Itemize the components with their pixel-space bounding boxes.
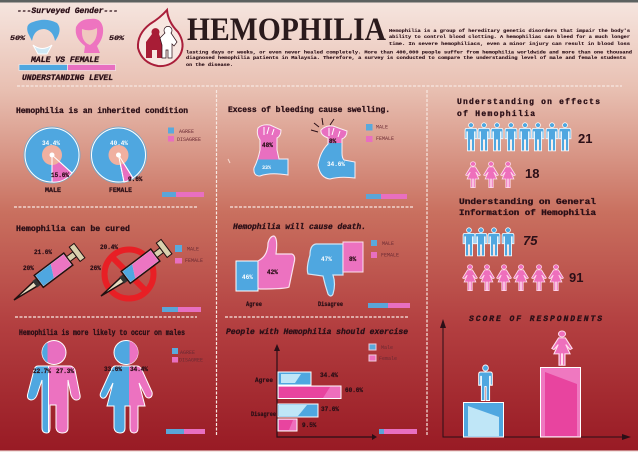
fist: first: 33%: [262, 165, 271, 171]
heading: Understanding on effects: [457, 98, 600, 107]
pie chart: female: [90, 126, 147, 184]
logo: blood drop with figures: [138, 10, 183, 66]
panel: swelling: [228, 106, 407, 199]
panel: score of respondents: [440, 315, 631, 440]
label: male vs female: MALE VS FEMALE: [30, 56, 99, 65]
pictogram: female 18: [466, 162, 539, 188]
heading: Hemophilia is an inherited condition: [16, 107, 188, 116]
pictogram: male 21: [465, 123, 592, 151]
panel: general information: [459, 198, 596, 291]
legend: MALE: [376, 124, 388, 130]
legend: DISAGREE: [179, 358, 203, 364]
syringe: disagree: [96, 239, 172, 303]
bar: male and female split: [19, 64, 116, 70]
heading: People with Hemophilia should exercise: [226, 328, 408, 337]
legend: [366, 124, 394, 142]
syringe values: 21.6%: [34, 249, 52, 256]
bar: summary: [379, 429, 417, 434]
panel: understanding on effects: [457, 98, 600, 188]
pictogram: male 21: 21: [578, 131, 592, 146]
label: female percent: 50%: [109, 35, 125, 42]
bar chart: exercise: Disagree: [251, 411, 276, 418]
figure: female split: [100, 340, 152, 433]
bar chart: exercise: 60.6%: [345, 387, 363, 394]
label: female: FEMALE: [109, 187, 132, 194]
fist: swollen: [311, 118, 355, 179]
fist: first: 48%: [262, 142, 273, 149]
figure: male split: 22.7%: [33, 368, 51, 375]
figure: female split: 33.6%: [104, 366, 122, 373]
legend: MALE: [187, 246, 199, 252]
intro paragraph: lasting days or weeks, or even never healed completely. More than 400,000 people suffer from hemophilia worldwide and more than one thousand: [186, 50, 632, 56]
pie chart: male: [24, 126, 80, 184]
bar: summary: [162, 192, 204, 197]
intro paragraph: on the disease.: [186, 62, 233, 68]
label: male percent: 50%: [10, 35, 26, 42]
legend: Male: [381, 345, 393, 351]
bar: summary: [162, 307, 201, 312]
legend: Female: [379, 356, 397, 362]
heading: surveyed gender: ---Surveyed Gender---: [17, 7, 118, 16]
thumb up: [236, 236, 295, 291]
panel: can be cured: [9, 225, 203, 312]
bar chart: exercise: [251, 344, 377, 440]
thumb up: 46%: [242, 274, 253, 281]
legend: [369, 344, 397, 362]
thumb down: 47%: [321, 256, 332, 263]
bar: summary: [368, 303, 410, 308]
intro paragraph: time. In severe hemophiliacs, even a minor injury can result in blood loss: [389, 41, 630, 47]
legend: FEMALE: [381, 252, 399, 258]
pictogram: male 75: 75: [523, 233, 538, 248]
legend: [175, 245, 203, 264]
bar chart: exercise: 37.6%: [321, 406, 339, 413]
legend: [172, 348, 203, 364]
legend: FEMALE: [185, 258, 203, 264]
bar chart: exercise: Agree: [255, 377, 273, 384]
syringe values: [23, 244, 118, 272]
chart: score bars: [440, 319, 631, 440]
heading: Hemophilia will cause death.: [233, 223, 366, 232]
heading: Hemophilia is more likely to occur on males: [19, 329, 185, 338]
heading: Excess of bleeding cause swelling.: [228, 106, 390, 115]
fist: swollen: 34.6%: [327, 161, 345, 168]
intro paragraph: ability to control blood clotting. A hemophiliac can bleed for a much longer: [389, 34, 630, 40]
intro paragraph: [186, 28, 632, 68]
intro paragraph: diagnosed hemophilia patients in Malaysia. Therefore, a survey is conducted to compare the understanding level of male and female students: [186, 55, 626, 61]
pie chart: male: 15.6%: [51, 172, 69, 179]
syringe values: 20%: [23, 265, 34, 272]
syringe values: 20.4%: [100, 244, 118, 251]
figure: female split: 34.4%: [130, 366, 148, 373]
legend: AGREE: [179, 129, 194, 135]
heading line two: Information of Hemophilia: [459, 209, 596, 218]
thumb up: 42%: [267, 269, 278, 276]
legend: AGREE: [180, 350, 195, 356]
panel: surveyed gender: [10, 7, 125, 83]
icon: male head: [27, 20, 60, 54]
legend: FEMALE: [376, 136, 394, 142]
figure: male split: [27, 340, 80, 433]
syringe: agree: [9, 243, 85, 307]
heading: Understanding on General: [459, 198, 596, 207]
panel: should exercise: [226, 328, 417, 440]
thumb down: 8%: [349, 256, 357, 263]
legend: MALE: [382, 241, 394, 247]
fist: first: [254, 125, 288, 176]
intro paragraph: Hemophilia is a group of hereditary genetic disorders that impair the body's: [389, 28, 630, 34]
pictogram: female 91: 91: [569, 270, 583, 285]
heading line two: of Hemophilia: [457, 110, 535, 119]
pie chart: female: 9.6%: [128, 176, 143, 183]
panel: inherited condition: [16, 107, 204, 197]
bar: summary: [366, 194, 407, 199]
label: male: MALE: [45, 187, 61, 194]
pie chart: male: 34.4%: [42, 140, 60, 147]
heading: Hemophilia can be cured: [16, 225, 130, 234]
fist: swollen: 8%: [329, 138, 337, 145]
legend: [371, 240, 399, 258]
no sign: [104, 250, 154, 298]
pie chart: female: 40.4%: [110, 140, 128, 147]
bar chart: exercise: 9.5%: [302, 422, 317, 429]
label: understanding level: UNDERSTANDING LEVEL: [22, 74, 113, 83]
label: agree: Agree: [246, 301, 262, 308]
figure: male split: 27.3%: [56, 368, 74, 375]
bar: summary: [166, 429, 205, 434]
legend: [168, 128, 201, 143]
title: HEMOPHILIA: [187, 12, 386, 48]
syringe values: 26%: [90, 265, 101, 272]
legend: DISAGREE: [177, 137, 201, 143]
heading: SCORE OF RESPONDENTS: [469, 315, 602, 324]
bar chart: exercise: 34.4%: [320, 372, 338, 379]
panel: cause death: [233, 223, 410, 308]
thumb down: [307, 242, 363, 296]
icon: female head: [76, 19, 103, 53]
panel: more likely on males: [19, 329, 205, 434]
label: disagree: Disagree: [318, 301, 343, 308]
pictogram: female 18: 18: [525, 166, 539, 181]
